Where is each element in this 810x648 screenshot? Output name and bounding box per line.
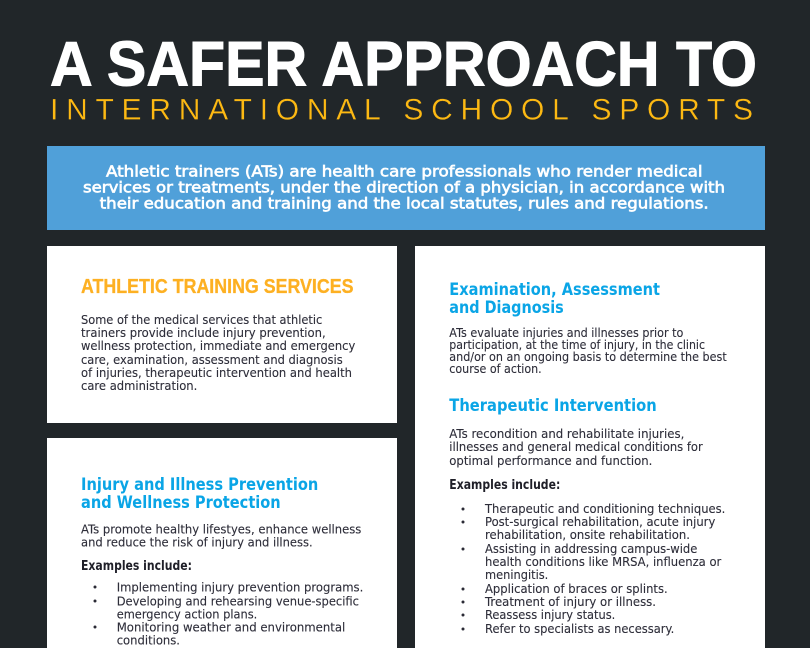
panel: introduction banner xyxy=(47,146,765,230)
text block: examination description: and/or on an ongoing basis to determine the best xyxy=(449,350,727,365)
text block: prevention description xyxy=(81,522,362,550)
bullet list: therapeutic examples: Application of braces or splints. xyxy=(485,582,668,597)
panel: introduction banner: Athletic trainers (ATs) are health care professionals who render medical xyxy=(106,163,702,181)
title: A SAFER APPROACH TO xyxy=(50,30,757,100)
bullet list: therapeutic examples: Therapeutic and conditioning techniques. xyxy=(484,502,725,517)
bullet list: prevention examples: emergency action plans. xyxy=(117,607,257,622)
bullet list: therapeutic examples: rehabilitation, onsite rehabilitation. xyxy=(485,528,690,543)
text block: therapeutic description xyxy=(449,427,703,469)
panel: introduction banner: their education and training and the local statutes, rules and regulations. xyxy=(100,195,709,213)
panel: athletic training services xyxy=(47,246,397,423)
bullet list: therapeutic examples: Refer to specialists as necessary. xyxy=(485,622,674,637)
text block: therapeutic description: optimal performance and function. xyxy=(449,454,652,469)
bullet list: prevention examples xyxy=(94,580,363,648)
bullet list: prevention examples: Implementing injury prevention programs. xyxy=(117,580,363,595)
heading: examination, assessment and diagnosis: Examination, Assessment xyxy=(449,280,660,299)
label: examples include: Examples include: xyxy=(449,478,560,493)
text block: services summary: trainers provide include injury prevention, xyxy=(81,326,326,341)
text block: examination description: ATs evaluate injuries and illnesses prior to xyxy=(449,326,683,341)
bullet list: therapeutic examples: meningitis. xyxy=(485,568,548,583)
bullet list: prevention examples: Developing and rehearsing venue-specific xyxy=(117,594,359,609)
text block: examination description: course of action. xyxy=(449,362,542,377)
bullet list: therapeutic examples: health conditions like MRSA, influenza or xyxy=(485,555,722,570)
heading: injury and illness prevention: and Wellness Protection xyxy=(81,493,281,512)
text block: services summary: wellness protection, immediate and emergency xyxy=(81,339,356,354)
heading: injury and illness prevention: Injury and Illness Prevention xyxy=(81,475,318,494)
text block: examination description xyxy=(449,326,727,377)
bullet list: therapeutic examples xyxy=(462,502,725,637)
text block: services summary: of injuries, therapeutic intervention and health xyxy=(81,366,352,381)
text block: services summary: Some of the medical services that athletic xyxy=(81,313,322,328)
text block: services summary xyxy=(81,313,356,394)
panel: introduction banner: services or treatments, under the direction of a physician, in accordance with xyxy=(83,179,725,197)
text block: examination description: participation, at the time of injury, in the clinic xyxy=(449,338,705,353)
heading: athletic training services: ATHLETIC TRAINING SERVICES xyxy=(81,276,354,298)
heading: examination, assessment and diagnosis: and Diagnosis xyxy=(449,298,564,317)
panel: injury and illness prevention xyxy=(47,438,397,648)
bullet list: therapeutic examples: Treatment of injury or illness. xyxy=(484,595,656,610)
heading: therapeutic intervention: Therapeutic Intervention xyxy=(449,396,657,415)
label: examples include: Examples include: xyxy=(81,559,192,574)
bullet list: therapeutic examples: Post-surgical rehabilitation, acute injury xyxy=(485,515,716,530)
subtitle: INTERNATIONAL SCHOOL SPORTS xyxy=(50,94,753,126)
title xyxy=(50,30,757,126)
text block: prevention description: ATs promote healthy lifestyes, enhance wellness xyxy=(81,522,362,537)
bullet list: therapeutic examples: Reassess injury status. xyxy=(485,608,615,623)
heading: injury and illness prevention xyxy=(81,475,318,512)
text block: services summary: care, examination, assessment and diagnosis xyxy=(81,353,343,368)
text block: services summary: care administration. xyxy=(81,379,197,394)
text block: prevention description: and reduce the risk of injury and illness. xyxy=(81,535,313,550)
bullet list: prevention examples: Monitoring weather and environmental xyxy=(117,620,345,635)
panel: examination and therapeutic intervention xyxy=(415,246,765,648)
text block: therapeutic description: ATs recondition and rehabilitate injuries, xyxy=(449,427,684,442)
heading: examination, assessment and diagnosis xyxy=(449,280,660,317)
text block: therapeutic description: illnesses and general medical conditions for xyxy=(449,440,703,455)
bullet list: therapeutic examples: Assisting in addressing campus-wide xyxy=(485,542,697,557)
